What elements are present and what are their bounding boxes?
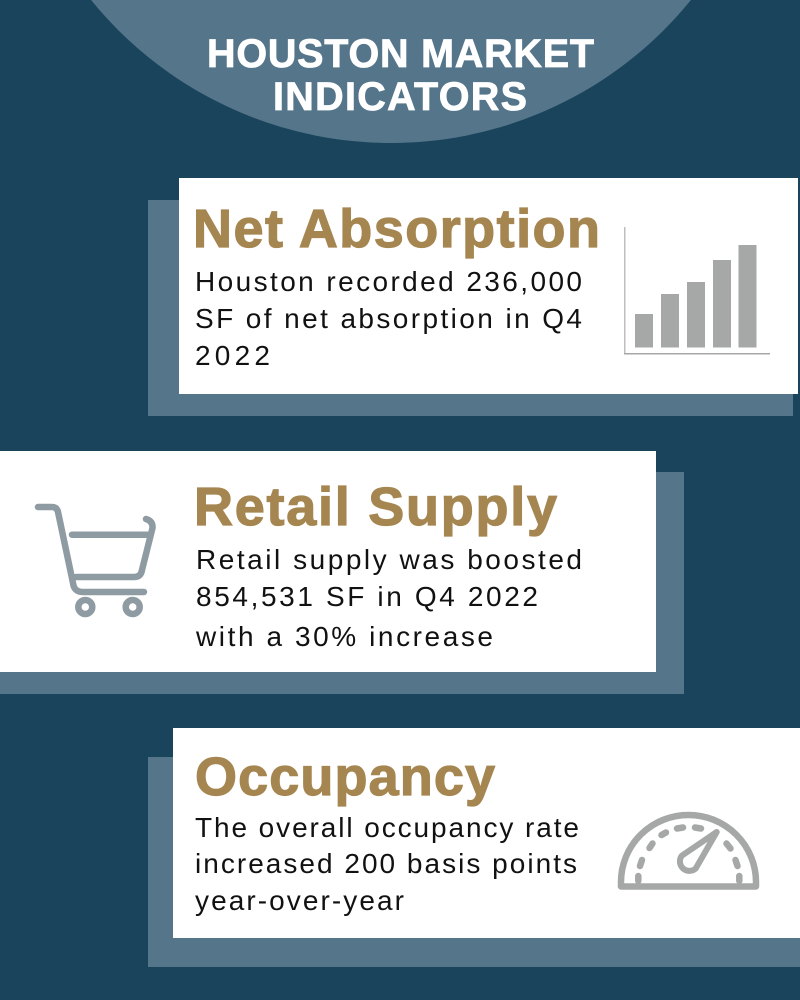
heading: retail supply: Retail Supply <box>194 477 557 537</box>
text: retail supply: with a 30% increase <box>195 621 493 652</box>
heading: occupancy: Occupancy <box>195 747 495 807</box>
heading: net absorption: Net Absorption <box>193 199 600 259</box>
text: retail supply: Retail supply was boosted <box>196 544 582 575</box>
title: INDICATORS <box>273 75 527 119</box>
title background semicircle <box>5 0 777 143</box>
text: occupancy: increased 200 basis points <box>195 848 577 879</box>
text: retail supply <box>195 544 582 652</box>
text: net absorption: 2022 <box>195 340 270 371</box>
text: net absorption <box>195 266 582 371</box>
text: occupancy: The overall occupancy rate <box>195 812 579 843</box>
panel: net absorption <box>148 178 798 416</box>
text: net absorption: SF of net absorption in Q4 <box>195 303 582 334</box>
icon: gauge <box>621 815 756 886</box>
panel: retail supply <box>0 451 684 694</box>
icon: bar chart <box>624 227 770 354</box>
text: net absorption: Houston recorded 236,000 <box>195 266 582 297</box>
text: occupancy: year-over-year <box>195 885 404 916</box>
icon: shopping cart <box>38 507 153 614</box>
panel: occupancy <box>148 728 800 967</box>
title banner <box>5 0 777 143</box>
title: HOUSTON MARKET <box>207 32 594 76</box>
text: retail supply: 854,531 SF in Q4 2022 <box>196 581 538 612</box>
text: occupancy <box>195 812 579 916</box>
title <box>207 32 594 119</box>
